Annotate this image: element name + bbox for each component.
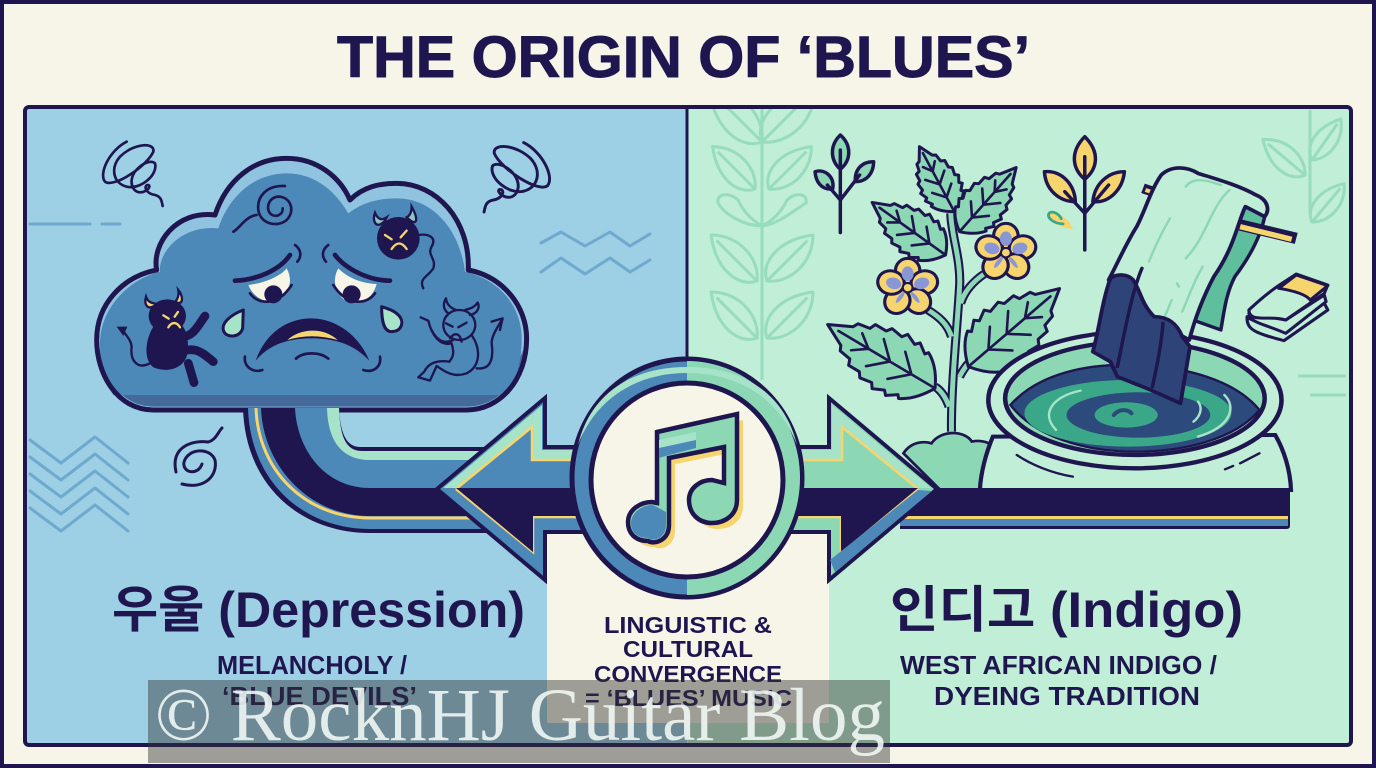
cloud outline (97, 158, 527, 410)
subtext: melancholy (217, 650, 417, 711)
heading: depression: 우울 (Depression) (112, 582, 525, 638)
cloud shade (100, 350, 523, 407)
center text: = ‘BLUES’ MUSIC (585, 685, 792, 711)
arrow: right bar to pot (900, 488, 1290, 529)
soil mound (903, 433, 991, 490)
pot rim (988, 332, 1282, 468)
wrinkles (295, 245, 328, 262)
flowers (875, 258, 941, 318)
cloud stroke (97, 158, 527, 410)
arrow: left pipe from cloud (243, 408, 490, 533)
title: THE ORIGIN OF ‘BLUES’ (337, 25, 1030, 90)
cloth dyed part (1093, 275, 1190, 403)
cloth front (1109, 168, 1267, 340)
leaves (900, 137, 973, 221)
spiral lower left (175, 428, 222, 485)
heading: indigo: 인디고 (Indigo) (890, 582, 1243, 638)
spiral (233, 186, 291, 232)
squiggle left (103, 142, 163, 206)
decorative chevrons left (30, 437, 128, 531)
decorative chevrons right (541, 232, 650, 274)
subtext: melancholy: MELANCHOLY / (217, 650, 407, 680)
center text: LINGUISTIC & (604, 612, 772, 638)
subtext: west african indigo (900, 650, 1217, 711)
icon: cloud with sad face and devils (97, 142, 550, 410)
icon: music note (628, 414, 743, 548)
left arrow head (437, 398, 585, 580)
watermark strip: © RocknHJ Guitar Blog (155, 674, 885, 757)
tears (223, 307, 402, 336)
center music badge (572, 359, 802, 597)
ring (572, 359, 802, 597)
cloud body (100, 173, 522, 395)
wooden bar front (1240, 225, 1296, 238)
sprig teal (815, 135, 874, 233)
pot details (1017, 453, 1259, 477)
stems (928, 213, 984, 432)
icon: indigo plant and dye pot (810, 135, 1328, 490)
devil top right (374, 207, 434, 288)
mouth (256, 318, 369, 361)
brows (235, 255, 390, 281)
center text (585, 612, 792, 711)
dashes (1298, 376, 1346, 395)
panel: depression (26, 108, 687, 744)
wooden bar back (1143, 188, 1158, 193)
right arrow head (789, 398, 937, 580)
subtext: west african indigo: WEST AFRICAN INDIGO / (900, 650, 1217, 680)
subtext: west african indigo: DYEING TRADITION (934, 681, 1200, 711)
squiggle right (484, 143, 550, 212)
divider (686, 108, 688, 362)
pale leaf vines (710, 109, 1346, 380)
devil left (117, 290, 213, 383)
dye liquid (1010, 365, 1259, 452)
folded cloth book (1247, 274, 1328, 341)
subtext: melancholy: ‘BLUE DEVILS’ (222, 681, 417, 711)
dashes (30, 222, 120, 226)
seed (1049, 213, 1073, 229)
center text: CULTURAL (623, 636, 753, 662)
center box (547, 528, 829, 723)
sprig yellow (1044, 137, 1124, 250)
panel: indigo (688, 77, 1352, 744)
center text: CONVERGENCE (594, 661, 782, 687)
right eye (335, 268, 377, 302)
devil right (418, 298, 503, 381)
left eye (248, 268, 290, 302)
pot body (980, 435, 1291, 490)
cloth back (1193, 204, 1265, 330)
